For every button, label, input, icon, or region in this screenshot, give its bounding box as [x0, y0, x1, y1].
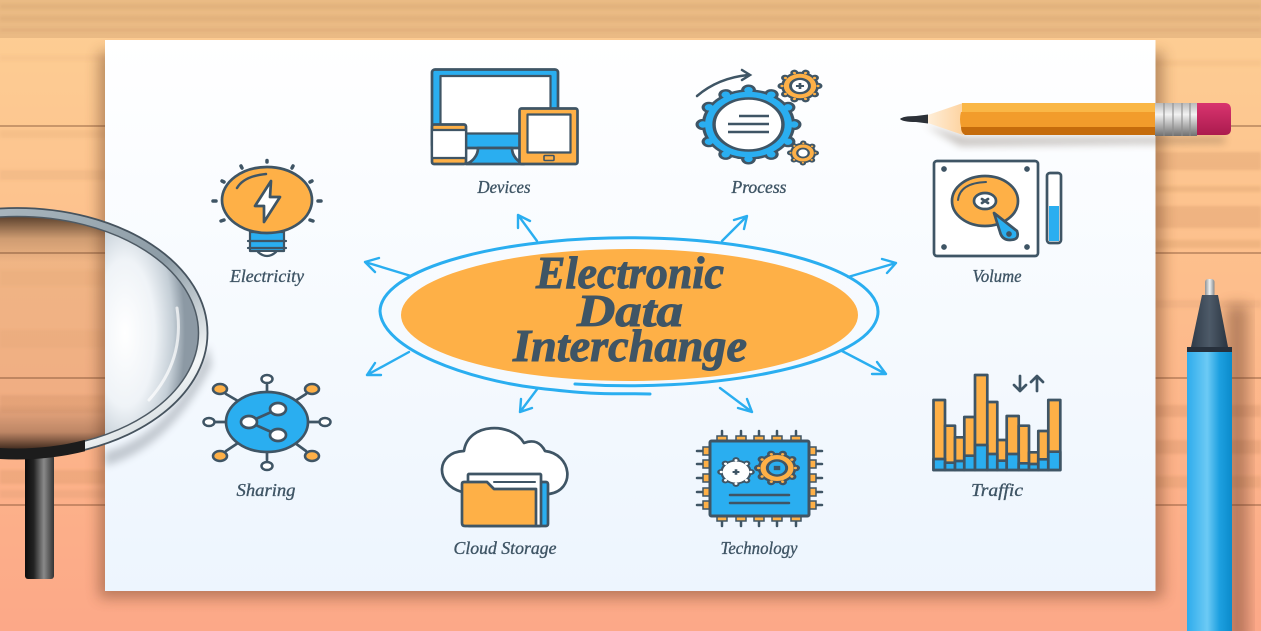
label: Technology: Technology	[720, 538, 798, 558]
dark cone	[1191, 295, 1228, 347]
label: Process: Process	[731, 177, 786, 197]
outer oval ring	[380, 238, 878, 394]
label: Volume: Volume	[972, 266, 1022, 286]
icon: devices	[432, 70, 578, 164]
lightning bolt	[255, 181, 280, 222]
pencil	[900, 103, 1231, 146]
label: Traffic: Traffic	[971, 480, 1023, 500]
chip body	[710, 441, 809, 516]
cloud	[442, 428, 567, 494]
arrows radiating from oval	[365, 215, 896, 412]
orange bars	[934, 375, 1060, 470]
blue folder back	[530, 482, 548, 526]
label: Devices: Devices	[477, 177, 530, 197]
orange gear	[781, 72, 819, 100]
blue bar bases	[934, 445, 1060, 470]
metal rim	[0, 212, 203, 454]
lens highlight	[149, 308, 178, 400]
paper	[468, 474, 541, 526]
black rim section	[0, 440, 85, 460]
label: Cloud Storage: Cloud Storage	[454, 538, 556, 558]
eraser	[1197, 103, 1231, 135]
chip pins	[697, 431, 822, 526]
icon: traffic bar chart	[934, 375, 1060, 470]
tablet	[520, 108, 578, 164]
icon: process gears	[697, 70, 819, 163]
rotation arrow	[697, 70, 750, 96]
title: Data	[576, 285, 683, 336]
gear text lines	[728, 116, 769, 132]
small gear	[790, 143, 816, 163]
orange barrel	[962, 103, 1156, 112]
icon: cloud storage	[442, 428, 567, 526]
lens glass	[0, 210, 205, 456]
read arm	[994, 213, 1018, 240]
magnifying glass	[0, 208, 212, 579]
paper sheet	[99, 40, 1163, 598]
pencil shadow	[925, 125, 1225, 146]
rays	[213, 160, 321, 221]
phone	[432, 124, 466, 164]
center oval with title	[380, 238, 878, 394]
connectors	[216, 385, 318, 460]
collar	[1187, 347, 1232, 352]
bulb glass	[222, 167, 312, 233]
chip text lines	[730, 495, 789, 503]
monitor	[432, 70, 558, 148]
outer nodes	[262, 375, 272, 383]
pin caps	[703, 436, 816, 521]
title: Interchange	[512, 320, 747, 371]
title: Electronic	[535, 247, 724, 298]
pen	[1187, 279, 1248, 631]
volume bar	[1047, 173, 1061, 243]
lead	[900, 114, 928, 124]
orange oval	[401, 249, 858, 381]
ring shadow	[105, 345, 212, 466]
icon: technology chip	[697, 431, 822, 526]
white gear	[720, 460, 752, 484]
pen shadow	[1226, 305, 1248, 631]
label: Sharing: Sharing	[236, 480, 296, 500]
metal ferrule	[1155, 103, 1197, 136]
large blue gear	[702, 89, 795, 160]
label: Electricity: Electricity	[229, 266, 304, 286]
icon: sharing network	[204, 375, 330, 470]
central circle	[226, 392, 308, 452]
orange gear	[758, 453, 796, 483]
up and down arrows	[1014, 376, 1043, 391]
icon: light bulb	[213, 160, 321, 256]
platter	[952, 176, 1018, 226]
bulb base	[250, 232, 284, 251]
orange folder	[462, 482, 536, 526]
handle	[25, 455, 54, 579]
sharpened wood	[925, 103, 963, 135]
icon: hard disk volume	[934, 161, 1061, 256]
metal tip	[1205, 279, 1214, 297]
blue barrel	[1187, 352, 1232, 631]
disk case	[934, 161, 1038, 256]
